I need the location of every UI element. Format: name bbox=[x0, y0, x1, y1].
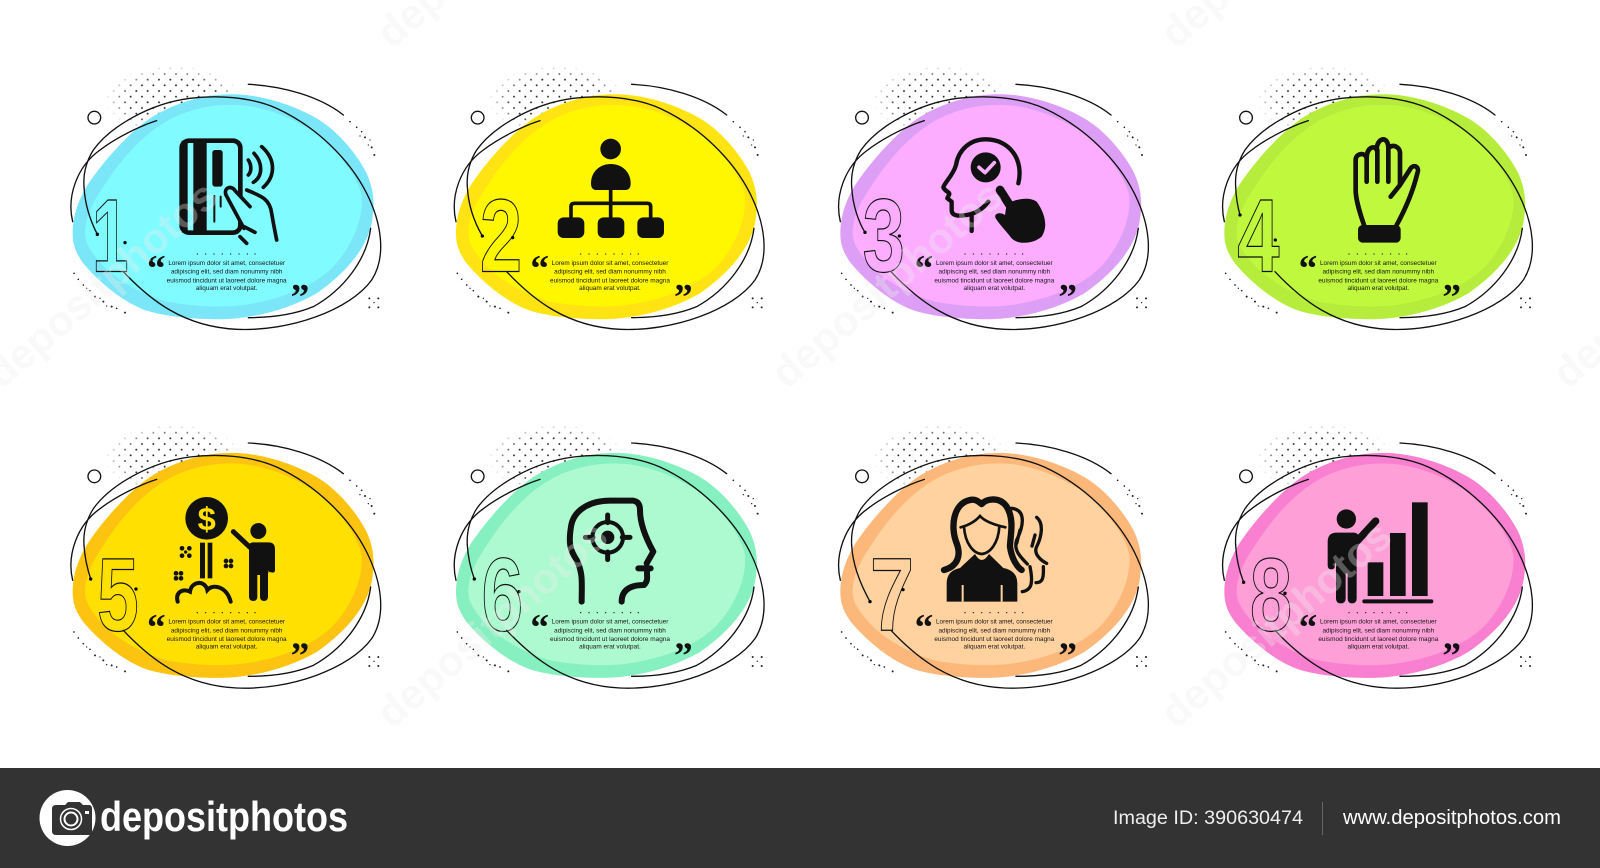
quote text: ” bbox=[291, 636, 309, 677]
quote text: aliquam erat volutpat. bbox=[196, 285, 258, 292]
quote text: Lorem ipsum dolor sit amet, consectetuer bbox=[552, 619, 669, 626]
quote text bbox=[530, 607, 693, 677]
panel: 5 dollar rocket bbox=[71, 422, 381, 688]
watermarks: depositphotos bbox=[367, 512, 616, 737]
quote text: euismod tincidunt ut laoreet dolore magna bbox=[1318, 277, 1439, 284]
quote text: aliquam erat volutpat. bbox=[1348, 644, 1409, 651]
image id: Image ID: 390630474 bbox=[1113, 808, 1303, 829]
number 6: 6 bbox=[482, 537, 523, 653]
quote text: Lorem ipsum dolor sit amet, consectetuer bbox=[1320, 619, 1437, 626]
quote text: Lorem ipsum dolor sit amet, consectetuer bbox=[168, 260, 286, 267]
quote text: Lorem ipsum dolor sit amet, consectetuer bbox=[936, 260, 1053, 267]
quote text: adipiscing elit, sed diam nonummy nibh bbox=[171, 627, 283, 634]
quote text: “ bbox=[915, 607, 933, 648]
panel: 3 approved head bbox=[839, 63, 1148, 330]
quote text bbox=[147, 607, 309, 677]
quote text bbox=[915, 607, 1077, 677]
number 1: 1 bbox=[92, 178, 129, 294]
number 8: 8 bbox=[1250, 538, 1292, 653]
quote text: Lorem ipsum dolor sit amet, consectetuer bbox=[1320, 260, 1437, 267]
website: www.depositphotos.com bbox=[1342, 807, 1561, 829]
quote text: euismod tincidunt ut laoreet dolore magna bbox=[550, 277, 670, 284]
icon: raised hand bbox=[1356, 139, 1418, 243]
quote text: euismod tincidunt ut laoreet dolore magna bbox=[167, 277, 287, 284]
quote text: ” bbox=[1442, 277, 1461, 318]
quote text bbox=[1299, 607, 1461, 677]
panel: 4 raised hand bbox=[1223, 63, 1532, 330]
watermarks: depositphotos bbox=[762, 172, 1011, 397]
quote text: Lorem ipsum dolor sit amet, consectetuer bbox=[552, 260, 669, 267]
quote text: ” bbox=[1442, 636, 1461, 677]
quote text: euismod tincidunt ut laoreet dolore magna bbox=[934, 636, 1055, 643]
quote text: ” bbox=[1058, 277, 1077, 318]
quote text: adipiscing elit, sed diam nonummy nibh bbox=[554, 269, 666, 276]
quote text: aliquam erat volutpat. bbox=[579, 644, 641, 651]
quote text: adipiscing elit, sed diam nonummy nibh bbox=[939, 627, 1050, 634]
icon: women group bbox=[944, 499, 1047, 602]
panel: 8 growth chart bbox=[1223, 422, 1532, 688]
quote text: ” bbox=[1058, 636, 1077, 677]
quote text: adipiscing elit, sed diam nonummy nibh bbox=[1323, 269, 1434, 276]
quote text: aliquam erat volutpat. bbox=[196, 644, 258, 651]
quote text: “ bbox=[147, 607, 166, 648]
quote text: aliquam erat volutpat. bbox=[1348, 285, 1409, 292]
quote text: adipiscing elit, sed diam nonummy nibh bbox=[1323, 627, 1434, 634]
quote text: ” bbox=[291, 277, 309, 318]
quote text bbox=[1299, 249, 1461, 318]
icon: head with check and pointer bbox=[943, 139, 1045, 243]
quote text: “ bbox=[1299, 607, 1317, 648]
icon: management hierarchy bbox=[558, 139, 664, 238]
quote text: “ bbox=[147, 249, 166, 290]
quote text: aliquam erat volutpat. bbox=[964, 644, 1025, 651]
quote text: adipiscing elit, sed diam nonummy nibh bbox=[171, 269, 283, 276]
number 5: 5 bbox=[97, 537, 139, 653]
quote text: euismod tincidunt ut laoreet dolore magna bbox=[167, 636, 287, 643]
panel: 6 target head bbox=[454, 422, 764, 688]
quote text bbox=[147, 249, 309, 318]
footer bar bbox=[0, 768, 1600, 868]
quote text: aliquam erat volutpat. bbox=[579, 285, 641, 292]
quote text: adipiscing elit, sed diam nonummy nibh bbox=[554, 627, 666, 634]
quote text: Lorem ipsum dolor sit amet, consectetuer bbox=[168, 619, 286, 626]
panel: 7 women bbox=[839, 422, 1148, 688]
number 2: 2 bbox=[480, 179, 522, 295]
icon: dollar launch and person bbox=[174, 497, 275, 602]
icon: head with target bbox=[570, 501, 653, 602]
quote text: “ bbox=[915, 249, 933, 290]
panel: 2 management bbox=[454, 63, 764, 330]
number 4: 4 bbox=[1237, 179, 1280, 295]
quote text: aliquam erat volutpat. bbox=[964, 285, 1025, 292]
number 7: 7 bbox=[870, 536, 914, 653]
quote text: euismod tincidunt ut laoreet dolore magna bbox=[550, 636, 670, 643]
icon: contactless card bbox=[182, 141, 277, 250]
quote text: ” bbox=[674, 636, 693, 677]
logo icon: camera bbox=[40, 790, 96, 846]
number 3: 3 bbox=[863, 179, 905, 295]
panel: 1 contactless card bbox=[71, 63, 381, 330]
quote text: “ bbox=[530, 607, 549, 648]
quote text bbox=[530, 249, 693, 318]
quote text bbox=[915, 249, 1077, 318]
quote text: “ bbox=[1299, 249, 1317, 290]
quote text: ” bbox=[674, 277, 693, 318]
icon: person with bar chart bbox=[1328, 502, 1433, 603]
quote text: euismod tincidunt ut laoreet dolore magna bbox=[934, 277, 1055, 284]
logo wordmark: depositphotos bbox=[100, 793, 348, 840]
quote text: “ bbox=[530, 249, 549, 290]
quote text: adipiscing elit, sed diam nonummy nibh bbox=[939, 269, 1050, 276]
icon: dollar launch and person: $ bbox=[198, 500, 216, 537]
quote text: euismod tincidunt ut laoreet dolore magna bbox=[1318, 636, 1439, 643]
watermarks: depositphotos bbox=[1151, 512, 1400, 737]
quote text: Lorem ipsum dolor sit amet, consectetuer bbox=[936, 619, 1053, 626]
